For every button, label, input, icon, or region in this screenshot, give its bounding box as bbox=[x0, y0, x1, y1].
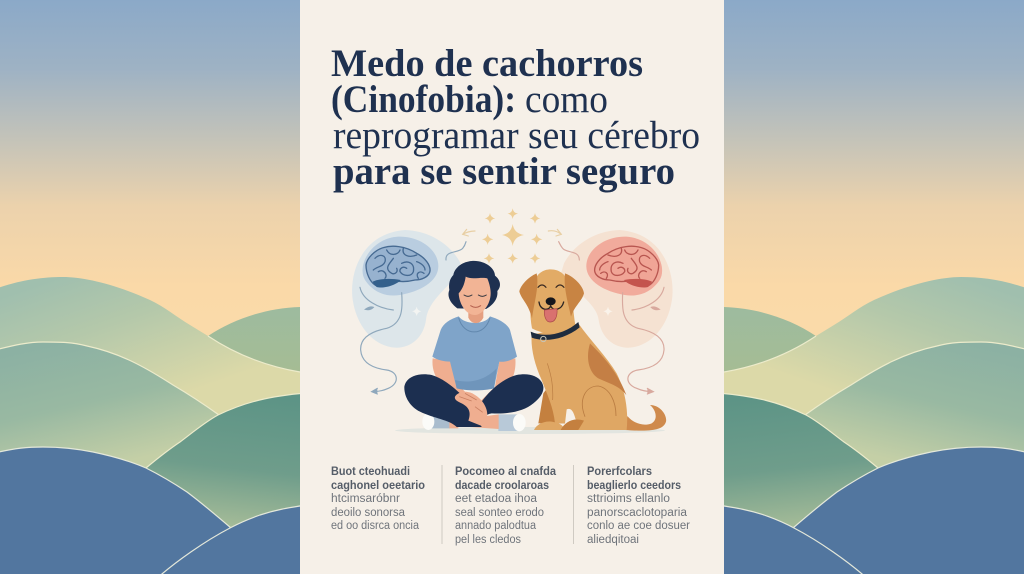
thigh bbox=[582, 386, 616, 417]
column 2 text: eet etadoa ihoa bbox=[455, 493, 538, 505]
ears bbox=[519, 273, 537, 318]
sparkles bbox=[482, 208, 542, 264]
title: (Cinofobia): bbox=[331, 78, 516, 121]
column 3 text: panorscaclotoparia bbox=[587, 507, 688, 519]
column 1 text: htcimsaróbnr bbox=[331, 493, 400, 505]
person bbox=[404, 261, 543, 431]
column 2 text: seal sonteo erodo bbox=[455, 507, 544, 519]
column 2 text: Pocomeo al cnafda bbox=[455, 466, 557, 478]
neck bbox=[468, 305, 483, 323]
column 1 text: deoilo sonorsa bbox=[331, 507, 406, 519]
back patch bbox=[588, 343, 626, 395]
column 1 text: ed oo disrca oncia bbox=[331, 520, 420, 532]
face bbox=[459, 277, 491, 315]
dog bbox=[519, 269, 666, 431]
column 3 text: aliedqitoai bbox=[587, 534, 639, 546]
left brain bubble bbox=[352, 229, 475, 394]
poster panel bbox=[300, 0, 724, 574]
shoes bbox=[428, 414, 450, 428]
t-shirt bbox=[432, 316, 517, 388]
tail bbox=[625, 405, 666, 431]
column 2 text: dacade croolaroas bbox=[455, 480, 549, 492]
title: Medo de cachorros bbox=[331, 42, 643, 85]
column divider bbox=[442, 465, 443, 544]
column 3 text: Porerfcolars bbox=[587, 466, 652, 478]
hair bbox=[448, 261, 500, 309]
collar bbox=[531, 322, 580, 340]
column 3 text: conlo ae coe dosuer bbox=[587, 520, 690, 532]
icon: red brain bbox=[595, 246, 659, 288]
paws bbox=[534, 422, 565, 430]
column 3 text: sttrioims ellanlo bbox=[587, 493, 670, 505]
body bbox=[531, 323, 627, 430]
right brain bubble bbox=[548, 229, 673, 394]
column 1 text: caghonel oeetario bbox=[331, 480, 425, 492]
column 1 text: Buot cteohuadi bbox=[331, 466, 410, 478]
right hills bbox=[718, 277, 1024, 574]
column divider bbox=[573, 465, 574, 544]
central illustration bbox=[352, 208, 673, 434]
icon: blue brain bbox=[366, 246, 430, 288]
legs bbox=[404, 374, 482, 427]
left hills bbox=[0, 277, 306, 574]
face bbox=[538, 285, 564, 287]
title: para se sentir seguro bbox=[333, 150, 675, 193]
hands bbox=[455, 392, 487, 427]
head bbox=[530, 269, 575, 333]
column 2 text: pel les cledos bbox=[455, 534, 521, 546]
arms bbox=[432, 358, 468, 398]
column 2 text bbox=[455, 466, 557, 546]
connector: left curved arrow bbox=[360, 229, 475, 394]
column 1 text bbox=[331, 466, 425, 532]
column 2 text: annado palodtua bbox=[455, 520, 537, 532]
ground shadow bbox=[395, 427, 665, 434]
title bbox=[331, 42, 700, 193]
column 3 text: beaglierlo ceedors bbox=[587, 480, 681, 492]
column 3 text bbox=[587, 466, 690, 546]
connector: right curved arrow bbox=[548, 229, 664, 394]
title: reprogramar seu cérebro bbox=[333, 114, 700, 157]
title: como bbox=[525, 78, 608, 121]
back leg shadow bbox=[538, 380, 565, 423]
